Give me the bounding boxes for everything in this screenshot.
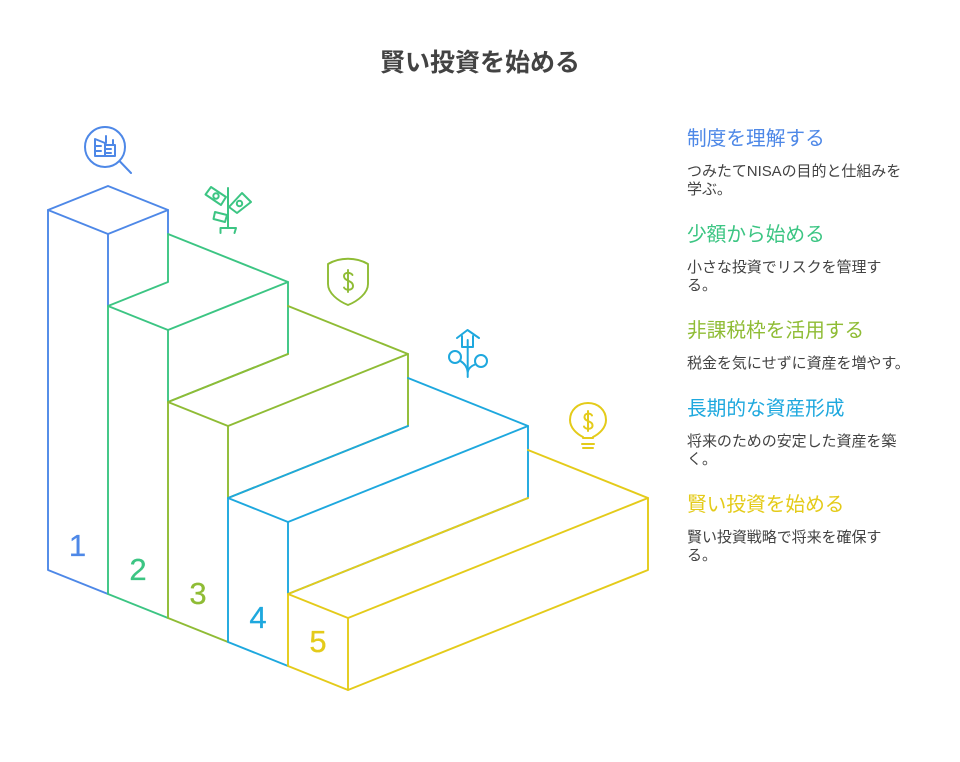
text block 4: く。 bbox=[687, 451, 717, 468]
step 5: yellow column bbox=[288, 450, 648, 690]
text block 1: 学ぶ。 bbox=[687, 181, 732, 198]
step 3: lime column bbox=[168, 306, 408, 642]
number 5: 5 bbox=[309, 624, 327, 659]
icon: magnifier over buildings bbox=[85, 127, 131, 173]
text block 2: 小さな投資でリスクを管理す bbox=[687, 259, 881, 276]
title: 賢い投資を始める bbox=[380, 49, 580, 77]
text block 2: る。 bbox=[687, 277, 717, 294]
number 1: 1 bbox=[69, 528, 86, 563]
text block 5: 賢い投資戦略で将来を確保す bbox=[687, 529, 881, 546]
step 2: green column bbox=[108, 234, 288, 618]
icon: money plant bbox=[206, 187, 251, 233]
text block 3: 非課税枠を活用する bbox=[687, 320, 864, 342]
text block 2 bbox=[687, 224, 881, 294]
number 2: 2 bbox=[129, 552, 147, 587]
icon: shield with dollar bbox=[328, 259, 368, 305]
icon: light bulb with dollar bbox=[570, 403, 606, 448]
text block 4 bbox=[687, 398, 896, 468]
text block 3: 税金を気にせずに資産を増やす。 bbox=[687, 355, 910, 372]
text block 5: 賢い投資を始める bbox=[687, 494, 844, 516]
text block 1: つみたてNISAの目的と仕組みを bbox=[687, 163, 901, 180]
text block 4: 長期的な資産形成 bbox=[687, 398, 844, 420]
text block 5 bbox=[687, 494, 881, 564]
icon: house growth plant bbox=[449, 330, 487, 377]
number 3: 3 bbox=[189, 576, 207, 611]
text block 2: 少額から始める bbox=[687, 224, 825, 246]
number 4: 4 bbox=[249, 600, 267, 635]
text block 5: る。 bbox=[687, 547, 717, 564]
text block 3 bbox=[687, 320, 910, 372]
text block 1 bbox=[687, 128, 901, 198]
text block 4: 将来のための安定した資産を築 bbox=[687, 433, 896, 450]
text block 1: 制度を理解する bbox=[687, 128, 825, 150]
step 4: cyan column bbox=[228, 378, 528, 666]
step 1: blue column bbox=[48, 186, 168, 594]
